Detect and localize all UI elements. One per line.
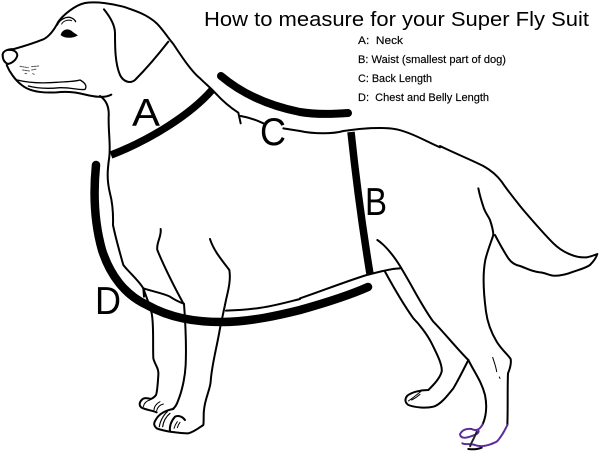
legend list (358, 35, 506, 104)
measurement line D: chest and belly (95, 165, 368, 322)
hind legs (300, 235, 511, 449)
head and neck outline (3, 2, 300, 225)
label B: B (365, 181, 387, 224)
whisker dots (20, 66, 39, 75)
tail (440, 146, 597, 276)
measurement line C: back length (221, 76, 348, 114)
measurement line A: neck (111, 90, 212, 155)
label A: A (132, 92, 160, 135)
label D: D (95, 280, 121, 323)
label C: C (260, 111, 286, 154)
purple retouched paw (460, 424, 507, 447)
legend D: D: Chest and Belly Length (358, 92, 489, 104)
legend A: A: Neck (358, 35, 404, 47)
title: How to measure for your Super Fly Suit (204, 9, 589, 31)
brow (57, 17, 76, 25)
front legs and chest (113, 225, 300, 433)
measurement line B: waist (351, 132, 370, 274)
legend C: C: Back Length (358, 73, 432, 85)
ear (104, 9, 168, 82)
eye (61, 30, 77, 37)
legend B: B: Waist (smallest part of dog) (358, 54, 506, 66)
back (300, 128, 440, 147)
